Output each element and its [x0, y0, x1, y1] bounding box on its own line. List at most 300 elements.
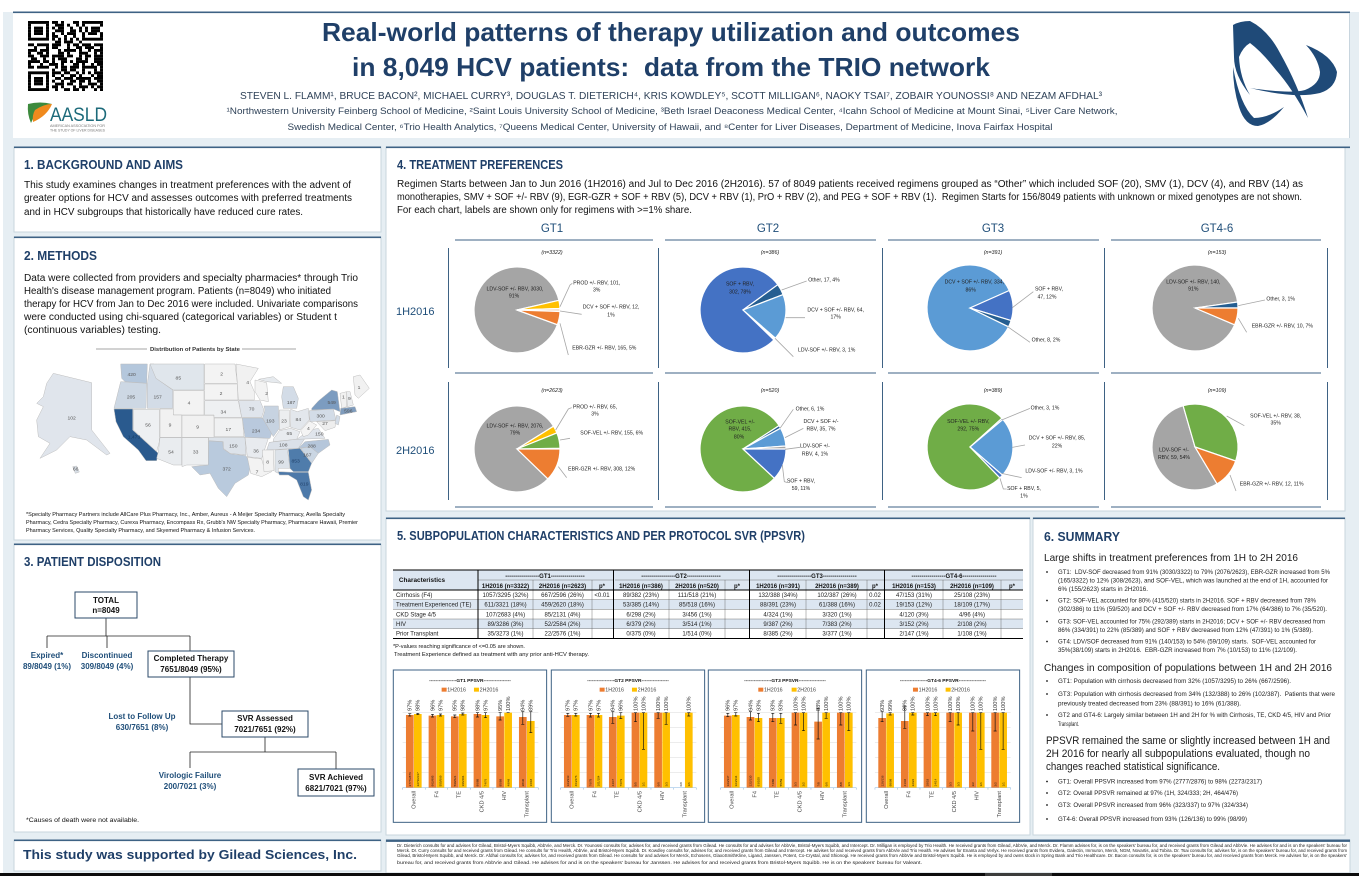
choropleth map: patients by state: 1: [342, 394, 345, 400]
bar chart: GT1 PPSVR: 962/995: [431, 775, 435, 786]
choropleth map: patients by state: 549: [327, 400, 336, 406]
pie chart: GT1 2H2016: (n=2623): [541, 388, 563, 394]
logo: AASLD: [28, 102, 107, 132]
choropleth map: patients by state: 596: [344, 409, 353, 415]
choropleth map: patients by state: 150: [229, 444, 238, 450]
bullets: treatment shifts: 86% (334/391) to 22% (85/389) and SOF + RBV decreased from 12% (47/391) to 1% (5/389).: [1058, 627, 1313, 634]
bar chart: GT1 PPSVR: TE: [457, 791, 463, 798]
table: subpopulation characteristics: 22/2576 (1%): [544, 632, 581, 638]
bullets: population changes: [1046, 678, 1336, 728]
choropleth map: patients by state: 17: [226, 427, 231, 433]
pie chart: GT1 1H2016: (n=3322): [541, 250, 563, 256]
bar chart: GT4-6 PPSVR: Transplant: [997, 791, 1003, 818]
bar chart: GT3 PPSVR: TE: [775, 791, 781, 798]
pie chart: GT4-6 1H2016: (n=153): [1208, 250, 1226, 256]
bar chart: GT1 PPSVR: 98%: [461, 700, 467, 711]
bar chart: GT2 PPSVR: CKD 4/5: [637, 791, 643, 812]
bar chart: GT4-6 PPSVR: Overall: [884, 791, 890, 809]
choropleth map: patients by state: 54: [168, 449, 174, 455]
choropleth map: patients by state: 288: [307, 444, 316, 450]
column heading: GT3: GT3: [982, 223, 1004, 235]
pie chart: GT2 2H2016: SOF-VEL +/-: [725, 419, 755, 425]
text: methods: [23, 273, 358, 336]
pie chart: GT3 2H2016: 22%: [1052, 443, 1063, 449]
logo: AASLD: AMERICAN ASSOCIATION FOR: [50, 124, 106, 128]
bar chart: GT3 PPSVR: 324/334: [734, 775, 738, 786]
bar chart: GT4-6 PPSVR: 100%: [948, 697, 954, 711]
bar chart: GT2 PPSVR: 464/476: [574, 775, 578, 786]
bar chart: GT1 PPSVR: 97%: [438, 700, 444, 711]
outcome: virologic failure: Virologic Failure: [159, 771, 222, 780]
bar chart: GT4-6 PPSVR: CKD 4/5: [952, 791, 958, 812]
choropleth map: patients by state: 4: [246, 380, 249, 386]
bar chart: GT4-6 PPSVR: 93%: [880, 700, 886, 711]
pie chart: GT2 2H2016: 59, 11%: [792, 486, 811, 492]
table: subpopulation characteristics: 52/2584 (2%): [544, 622, 581, 628]
footnote: specialty pharmacy partners: [26, 512, 358, 534]
table: subpopulation characteristics: 6/379 (2%): [626, 622, 656, 628]
text: background: greater options for HCV and assesses outcomes with preferred treatments: [24, 193, 352, 204]
bar chart: GT4-6 PPSVR: 3/3: [956, 782, 960, 786]
authors and affiliations: ¹Northwestern University Feinberg School of Medicine, ²Saint Louis University School of Medicine, ³Beth Israel Deaconess Medical Center, ⁴Icahn School of Medicine at Mount Sinai, ⁵Liver Care Network,: [226, 106, 1118, 116]
heading: methods: 2. METHODS: [24, 249, 97, 263]
pie chart: GT1 1H2016: 91%: [509, 294, 520, 300]
bar chart: GT3 PPSVR: Transplant: [843, 791, 849, 818]
bar chart: GT3 PPSVR: 1H2016: [764, 688, 783, 694]
bar chart: GT1 PPSVR: [393, 670, 547, 822]
subheading: population changes: Changes in composition of populations between 1H and 2H 2016: [1044, 662, 1332, 674]
bar chart: GT3 PPSVR: 100%: [793, 697, 799, 711]
bar chart: GT2 PPSVR: 3/3: [664, 782, 668, 786]
table: subpopulation characteristics: 61/388 (16%): [819, 603, 855, 609]
pie chart: GT2 2H2016: [700, 388, 839, 492]
bar chart: GT4-6 PPSVR: 100%: [979, 697, 985, 711]
table: subpopulation characteristics: 3/152 (2%): [899, 622, 929, 628]
pie chart: GT3 2H2016: Other, 3, 1%: [1031, 406, 1060, 412]
bar chart: GT3 PPSVR: HIV: [820, 791, 826, 800]
choropleth map: patients by state: 2: [220, 372, 223, 378]
table: subpopulation characteristics: 18/109 (17%): [954, 603, 990, 609]
pie chart: GT4-6 2H2016: (n=109): [1208, 388, 1226, 394]
bar chart: GT2 PPSVR: -----------------GT2 PPSVR-----------------: [587, 678, 669, 684]
bar chart: GT1 PPSVR: 74/76: [484, 779, 488, 786]
bar chart: GT4-6 PPSVR: 100%: [925, 697, 931, 711]
footnote: specialty pharmacy partners: Pharmacy, Cedra Specialty Pharmacy, Curexa Pharmacy, Encompass Rx, Grubb's NW Specialty Pharmacy, Pharmacare Hawaii, Premier: [26, 520, 358, 526]
table: subpopulation characteristics: 1H2016 (n=153): [892, 584, 936, 590]
bullets: population changes: GT3: Population with cirrhosis decreased from 34% (132/388) to 26% (102/387). Patients that were: [1058, 691, 1336, 698]
bullets: treatment shifts: GT1: LDV-SOF decreased from 91% (3030/3322) to 79% (2076/2623), EBR-GZR increased from 5%: [1058, 569, 1330, 576]
panel: subpopulation characteristics: [386, 518, 1030, 835]
table: subpopulation characteristics: 459/2620 (18%): [541, 603, 584, 609]
table: subpopulation characteristics: 1/514 (0%): [682, 632, 712, 638]
bar chart: GT1 PPSVR: 100%: [506, 697, 512, 711]
bar chart: GT2 PPSVR: 100%: [664, 697, 670, 711]
bar chart: GT1 PPSVR: F4: [434, 791, 440, 798]
box: SVR achieved: 6821/7021 (97%): [305, 784, 367, 793]
table: subpopulation characteristics: p*: [1009, 584, 1016, 590]
text: methods: Data were collected from providers and specialty pharmacies* through Trio: [24, 273, 358, 284]
text: treatment preferences intro: Regimen Starts between Jan to Jun 2016 (1H2016) and Jul to Dec 2016 (2H2016). 57 of 8049 patients received regimens grouped as “Other” which included SOF (20), SMV (1), DCV (4), and RBV (14) as: [397, 179, 1303, 190]
table: subpopulation characteristics: Prior Transplant: [396, 632, 439, 638]
logo: AASLD: THE STUDY OF LIVER DISEASES: [50, 128, 106, 132]
table: subpopulation characteristics: 89/382 (23%): [623, 593, 659, 599]
bar chart: GT4-6 PPSVR: 100%: [933, 697, 939, 711]
pie chart: GT1 1H2016: 1%: [607, 313, 615, 319]
bar chart: GT1 PPSVR: Transplant: [525, 791, 531, 818]
heading: subpopulation characteristics: 5. SUBPOPULATION CHARACTERISTICS AND PER PROTOCOL SVR (PPSVR): [397, 529, 805, 543]
table: subpopulation characteristics: -----------------GT1-----------------: [505, 574, 585, 580]
bar chart: GT1 PPSVR: 85/89: [498, 779, 502, 786]
bullets: treatment shifts: 6% (155/2623) starts in 2H2016.: [1058, 586, 1148, 593]
bar chart: GT1 PPSVR: 396/404: [461, 775, 465, 786]
subheading: PPSVR finding: [1046, 735, 1330, 773]
bullets: population changes: GT1: Population with cirrhosis decreased from 32% (1057/3295) to 26% (667/2596).: [1058, 678, 1291, 685]
outcome: expired: Expired*: [31, 651, 64, 660]
column heading: GT4-6: GT4-6: [1201, 223, 1233, 235]
title: Real-world patterns of therapy utilization and outcomes: [322, 17, 1020, 47]
pie chart: GT4-6 2H2016: 35%: [1271, 421, 1281, 427]
column heading: GT2: GT2: [757, 223, 779, 235]
bar chart: GT2 PPSVR: 96%: [619, 700, 625, 711]
table: subpopulation characteristics: 6/298 (2%): [626, 612, 656, 618]
outcome: discontinued: 309/8049 (4%): [81, 662, 134, 671]
choropleth map: patients by state: 27: [322, 421, 328, 427]
bar chart: GT2 PPSVR: 76/78: [589, 779, 593, 786]
pie chart: GT2 1H2016: SOF + RBV,: [726, 282, 754, 288]
bar chart: GT3 PPSVR: [708, 670, 862, 822]
choropleth map: patients by state: 66: [73, 467, 79, 473]
pie chart: GT4-6 2H2016: RBV, 59, 54%: [1158, 455, 1190, 461]
panel: patient disposition: [14, 544, 381, 832]
bullets: treatment shifts: GT3: SOF-VEL accounted for 75% (292/389) starts in 2H2016; DCV + SOF +/- RBV decreased from: [1058, 618, 1325, 626]
table: subpopulation characteristics: 1H2016 (n=386): [619, 584, 663, 590]
text: methods: (continuous variables) testing.: [24, 325, 161, 336]
pie chart: GT3 2H2016: LDV-SOF +/- RBV, 3, 1%: [1025, 468, 1083, 474]
bar chart: GT3 PPSVR: 55/59: [779, 779, 783, 786]
bar chart: GT4-6 PPSVR: 126/136: [880, 775, 884, 786]
bar chart: GT3 PPSVR: CKD 4/5: [797, 791, 803, 812]
row label: 2H2016: 2H2016: [396, 445, 435, 457]
pie chart: GT4-6 2H2016: EBR-GZR +/- RBV, 12, 11%: [1240, 482, 1304, 488]
bar chart: GT4-6 PPSVR: 100%: [911, 697, 917, 711]
bar chart: GT4-6 PPSVR: 89%: [903, 700, 909, 711]
pie chart: GT1 2H2016: 3%: [591, 412, 599, 418]
table: subpopulation characteristics: 1/108 (1%): [957, 632, 987, 638]
text: disclosures: Gilead, Bristol-Myers Squibb, and Merck. Dr. Afdhal consults for, advises for, and received grants from Gilead. He consults for and advises for Merck, Echosens, GlaxoSmithKline, Ligand, Janssen, Potent, Co-Crystal, and Shionogi. He received grants from AbbVie and Bristol-Myers Squibb. He is employed by and owns stock in Spring Bank and Trio Healthcare. Dr. Bacon consults for, is on the speakers' bureau for, and received grants from Merck. He advises for, is on the speakers': [397, 853, 1347, 858]
box: completed therapy: [148, 651, 234, 677]
pie chart: GT4-6 1H2016: 91%: [1188, 287, 1199, 293]
footnote: specialty pharmacy partners: Pharmacy Services, Quality Specialty Pharmacy, and Skyemed Pharmacy & Infusion Services.: [26, 528, 255, 534]
bar chart: GT1 PPSVR: CKD 4/5: [479, 791, 485, 812]
footnote: specialty pharmacy partners: *Specialty Pharmacy Partners include AllCare Plus Pharmacy, Inc., Amber, Aureus - A Meijer Specialty Pharmacy, Avella Specialty: [26, 512, 345, 518]
heading: summary: 6. SUMMARY: [1044, 530, 1121, 544]
choropleth map: patients by state: 150: [315, 432, 324, 438]
flowchart: disposition: [23, 592, 374, 796]
table: subpopulation characteristics: 89/3286 (3%): [487, 622, 524, 628]
bar chart: GT3 PPSVR: 6/6: [824, 782, 828, 786]
bar chart: GT1 PPSVR: 98%: [416, 700, 422, 711]
bar chart: GT4-6 PPSVR: 2/2: [971, 782, 975, 786]
table: subpopulation characteristics: -----------------GT4-6-----------------: [912, 574, 996, 580]
table: subpopulation characteristics: p*: [872, 584, 879, 590]
bar chart: GT1 PPSVR: 94%: [521, 700, 527, 711]
bar chart: GT1 PPSVR: 86/88: [476, 779, 480, 786]
pie chart: GT2 2H2016: Other, 6, 1%: [796, 407, 825, 413]
choropleth map: patients by state: 108: [279, 443, 288, 449]
text: treatment preferences intro: monotherapies, SMV + SOF +/- RBV (9), EGR-GZR + SOF + RBV (5), DCV + RBV (1), PrO + RBV (2), and PEG + SOF + RBV (1). Regimen Starts for 156/8049 patients with unknown or mixed genotypes are not shown.: [397, 192, 1302, 203]
bar chart: GT2 PPSVR: F4: [592, 791, 598, 798]
table: subpopulation characteristics: 0.02: [869, 593, 881, 599]
bar chart: GT3 PPSVR: 100%: [839, 697, 845, 711]
pie chart: GT3 1H2016: DCV + SOF +/- RBV, 334,: [945, 280, 1004, 286]
choropleth map: patients by state: 187: [287, 400, 295, 406]
bar chart: GT4-6 PPSVR: F4: [907, 791, 913, 798]
outcome: discontinued: [81, 651, 134, 671]
bar chart: GT4-6 PPSVR: 2/2: [993, 782, 997, 786]
table: subpopulation characteristics: CKD Stage 4/5: [396, 612, 437, 618]
pie chart: GT3 2H2016: [927, 388, 1085, 499]
bar chart: GT2 PPSVR: 97%: [574, 700, 580, 711]
bar chart: GT2 PPSVR: [551, 670, 705, 822]
bar chart: GT2 PPSVR: 101/104: [597, 775, 601, 786]
bar chart: GT1 PPSVR: 16/18: [529, 779, 533, 786]
bar chart: GT3 PPSVR: 97%: [734, 700, 740, 711]
choropleth map: patients by state: 234: [252, 429, 260, 435]
text: disclosures: [397, 843, 1347, 865]
table: subpopulation characteristics: Characteristics: [399, 577, 446, 584]
table: subpopulation characteristics: 1H2016 (n=391): [756, 584, 800, 590]
bar chart: GT4-6 PPSVR: HIV: [975, 791, 981, 800]
table: subpopulation characteristics: 1H2016 (n=3322): [482, 584, 529, 590]
bar chart: GT1 PPSVR: 555/569: [439, 775, 443, 786]
bar chart: GT3 PPSVR: 100%: [824, 697, 830, 711]
bar chart: GT1 PPSVR: 97%: [483, 700, 489, 711]
table: subpopulation characteristics: 4/96 (4%): [959, 612, 985, 618]
choropleth map: patients by state: 36: [253, 448, 259, 454]
bar chart: GT2 PPSVR: 97%: [566, 700, 572, 711]
bar chart: GT2 PPSVR: HIV: [660, 791, 666, 800]
title: [322, 17, 1020, 82]
box: total: [75, 592, 137, 618]
choropleth map: patients by state: 853: [291, 459, 300, 465]
bullets: PPSVR: GT3: Overall PPSVR increased from 96% (323/337) to 97% (324/334): [1058, 802, 1248, 809]
choropleth map: patients by state: 33: [193, 449, 199, 455]
bullets: treatment shifts: [1046, 569, 1330, 654]
panel: header: [13, 12, 1350, 138]
text: disclosures: bureau for, and received grants from AbbVie and Gilead. He advises for and is on the speakers' bureau for Janssen. He advises for and received grants from Bristol-Myers Squibb. He is on the speakers' bureau for Valeant.: [397, 860, 922, 865]
bar chart: GT4-6 PPSVR: -----------------GT4-6 PPSVR-----------------: [900, 678, 986, 684]
pie chart: GT1 1H2016: [474, 250, 639, 355]
box: completed therapy: 7651/8049 (95%): [160, 665, 222, 674]
bar chart: GT2 PPSVR: 100%: [633, 697, 639, 711]
table: subpopulation characteristics: 0.02: [869, 603, 881, 609]
table: subpopulation characteristics: p*: [599, 584, 606, 590]
bar chart: GT4-6 PPSVR: 100%: [956, 697, 962, 711]
bar chart: GT3 PPSVR: F4: [752, 791, 758, 798]
table: subpopulation characteristics: HIV: [396, 622, 406, 628]
authors and affiliations: [226, 91, 1118, 132]
pie chart: GT4-6 2H2016: SOF-VEL +/- RBV, 38,: [1250, 413, 1301, 419]
table: subpopulation characteristics: 132/388 (34%): [758, 593, 798, 599]
choropleth map: patients by state: 70: [249, 407, 255, 413]
pie chart: GT1 1H2016: PROD +/- RBV, 101,: [573, 281, 620, 287]
bar chart: GT4-6 PPSVR: TE: [929, 791, 935, 798]
table: subpopulation characteristics: 3/456 (1%): [682, 612, 712, 618]
bar chart: GT3 PPSVR: 323/337: [726, 775, 730, 786]
bar chart: GT3 PPSVR: 94%: [748, 700, 754, 711]
bar chart: GT3 PPSVR: 100%: [801, 697, 807, 711]
text: disclosures: Merck. Dr. Curry consults for and received grants from Gilead. He consults for Trio Health, AbbVie, and Bristol-Myers Squibb. Dr. Kowdley consults for, advises for, and received grants from Gilead and Intercept. He advises for and received grants from AbbVie and Trio Health. He advises for Enanta and Verlyx. He received grants from Evidera, Galectin, Immuron, Merck, NGM, Novartis, and Tobira. Dr. Tsai consults for, advises for, is on the speakers' bureau for, and received grants from: [397, 848, 1347, 853]
bar chart: GT3 PPSVR: 93%: [756, 700, 762, 711]
table: subpopulation characteristics: <0.01: [594, 593, 610, 599]
table: subpopulation characteristics: 2/108 (2%): [957, 622, 987, 628]
table footnotes: *P-values reaching significance of <=0.05 are shown.: [393, 644, 525, 650]
box: SVR assessed: SVR Assessed: [237, 714, 293, 723]
table: subpopulation characteristics: 111/518 (21%): [678, 593, 716, 599]
panel: methods: [14, 236, 381, 540]
text: background: and in HCV subgroups that historically have reduced cure rates.: [24, 207, 303, 218]
authors and affiliations: STEVEN L. FLAMM¹, BRUCE BACON², MICHAEL CURRY³, DOUGLAS T. DIETERICH⁴, KRIS KOWDLEY⁵, SCOTT MILLIGAN⁶, NAOKY TSAI⁷, ZOBAIR YOUNOSSI⁸ AND NEZAM AFDHAL³: [240, 91, 1103, 102]
pie chart: GT3 2H2016: SOF-VEL +/- RBV,: [947, 419, 990, 425]
choropleth map: patients by state: 4: [307, 426, 310, 432]
bullets: population changes: Transplant.: [1058, 721, 1079, 728]
row label: 1H2016: 1H2016: [396, 306, 435, 318]
table: subpopulation characteristics: 1057/3295 (32%): [482, 593, 529, 599]
panel: sponsor: [14, 840, 381, 871]
pie chart: GT1 1H2016: EBR-GZR +/- RBV, 165, 5%: [572, 345, 637, 351]
bar chart: GT3 PPSVR: 3/3: [794, 782, 798, 786]
table: subpopulation characteristics: 88/391 (23%): [760, 603, 796, 609]
bar chart: GT2 PPSVR: 6/6: [656, 782, 660, 786]
bar chart: GT4-6 PPSVR: 99%: [888, 700, 894, 711]
pie chart: GT1 1H2016: 3%: [593, 288, 601, 294]
choropleth map: patients by state: 84: [296, 417, 301, 423]
pie chart: GT2 1H2016: (n=386): [761, 250, 779, 256]
pie chart: GT4-6 1H2016: Other, 3, 1%: [1266, 297, 1295, 303]
bar chart: GT2 PPSVR: 1/1: [687, 782, 691, 786]
bullets: PPSVR: GT1: Overall PPSVR increased from 97% (2777/2876) to 98% (2273/2317): [1058, 778, 1262, 786]
box: SVR achieved: [298, 769, 374, 796]
pie chart: GT4-6 1H2016: EBR-GZR +/- RBV, 10, 7%: [1252, 324, 1313, 330]
bullets: treatment shifts: (302/386) to 11% (59/520) and DCV + SOF +/- RBV decreased from 17% (64/386) to 7% (35/520).: [1058, 606, 1327, 613]
pie chart: GT2 2H2016: DCV + SOF +/-: [804, 419, 839, 425]
bar chart: GT1 PPSVR: 1H2016: [447, 688, 466, 694]
bar chart: GT1 PPSVR: 97%: [408, 700, 414, 711]
bar chart: GT4-6 PPSVR: 98/99: [888, 779, 892, 786]
bar chart: GT2 PPSVR: TE: [615, 791, 621, 798]
title: in 8,049 HCV patients: data from the TRIO network: [352, 52, 991, 82]
bar chart: GT1 PPSVR: 49/49: [506, 779, 510, 786]
pie chart: GT4-6 2H2016: LDV-SOF +/-: [1159, 448, 1189, 454]
choropleth map: patients by state: 205: [127, 394, 135, 400]
pie chart: GT1 2H2016: [474, 388, 643, 492]
bar chart: GT1 PPSVR: 2273/2317: [416, 772, 420, 786]
footnote: causes of death: *Causes of death were not available.: [26, 817, 139, 824]
table: subpopulation characteristics: 7/383 (2%): [822, 622, 852, 628]
pie chart: GT1 2H2016: PROD +/- RBV, 65,: [573, 405, 617, 411]
bar chart: GT2 PPSVR: 97%: [596, 700, 602, 711]
choropleth map: patients by state: 420: [128, 372, 136, 378]
choropleth map: patients by state: 9: [196, 424, 199, 430]
choropleth map: patients by state: 23: [281, 419, 287, 425]
table: subpopulation characteristics: 35/3273 (1%): [487, 632, 524, 638]
table: subpopulation characteristics: -----------------GT2-----------------: [641, 574, 721, 580]
choropleth map: patients by state: 1: [358, 385, 361, 391]
box: completed therapy: Completed Therapy: [154, 654, 229, 663]
bar chart: GT4-6 PPSVR: 100%: [993, 697, 999, 711]
table: subpopulation characteristics: Treatment Experienced (TE): [396, 603, 471, 609]
arrows: disposition flow: [47, 618, 336, 769]
pie chart: GT3 1H2016: Other, 8, 2%: [1032, 338, 1061, 344]
box: SVR assessed: 7021/7651 (92%): [234, 725, 296, 734]
table: subpopulation characteristics: 4/120 (3%): [899, 612, 929, 618]
pie chart: GT3 1H2016: SOF + RBV,: [1035, 287, 1063, 293]
bar chart: GT1 PPSVR: 95%: [453, 700, 459, 711]
QR code: [28, 22, 103, 90]
pie chart: GT3 1H2016: 47, 12%: [1038, 294, 1057, 300]
bar chart: GT4-6 PPSVR: 14/14: [934, 779, 938, 786]
bar chart: GT4-6 PPSVR: 100%: [1001, 697, 1007, 711]
authors and affiliations: Swedish Medical Center, ⁶Trio Health Analytics, ⁷Queens Medical Center, University of Hawaii, and ⁸Center for Liver Diseases, Department of Medicine, Inova Fairfax Hospital: [288, 122, 1052, 132]
bar chart: GT2 PPSVR: 100%: [687, 697, 693, 711]
pie chart: GT2 1H2016: [700, 250, 864, 357]
bar chart: GT4-6 PPSVR: 3/3: [948, 782, 952, 786]
pie chart: GT3 2H2016: 292, 75%: [957, 427, 980, 433]
pie chart: GT1 1H2016: LDV-SOF +/- RBV, 3030,: [486, 287, 543, 293]
bar chart: GT3 PPSVR: -----------------GT3 PPSVR-----------------: [744, 678, 826, 684]
bar chart: GT1 PPSVR: HIV: [502, 791, 508, 800]
subheading: PPSVR finding: 2H 2016 for nearly all subpopulations evaluated, though no: [1046, 748, 1310, 760]
bar chart: GT4-6 PPSVR: 100%: [971, 697, 977, 711]
pie chart: GT1 1H2016: DCV + SOF +/- RBV, 12,: [583, 305, 639, 311]
pie chart: GT3 2H2016: (n=389): [984, 388, 1002, 394]
bar chart: GT4-6 PPSVR: [866, 670, 1020, 822]
text: background: This study examines changes in treatment preferences with the advent of: [24, 180, 351, 191]
subheading: PPSVR finding: changes reached statistical significance.: [1046, 761, 1220, 773]
table: subpopulation characteristics: 2H2016 (n=520): [675, 584, 719, 590]
map title: Distribution of Patients by State: [150, 347, 240, 353]
bar chart: GT4-6 PPSVR: 22/22: [911, 779, 915, 786]
table: subpopulation characteristics: 667/2596 (26%): [541, 593, 584, 599]
table: subpopulation characteristics: p*: [734, 584, 741, 590]
heading: background and aims: 1. BACKGROUND AND AIMS: [24, 158, 183, 172]
bar chart: GT3 PPSVR: 122/130: [749, 775, 753, 786]
bar chart: GT3 PPSVR: 93%: [771, 700, 777, 711]
bar chart: GT3 PPSVR: 93/100: [757, 777, 761, 786]
panel: background and aims: [14, 146, 381, 232]
outcome: lost to follow up: 630/7651 (8%): [116, 723, 169, 732]
bullets: treatment shifts: GT2: SOF-VEL accounted for 80% (415/520) starts in 2H2016. SOF + RBV decreased from 78%: [1058, 598, 1316, 604]
choropleth map: patients by state: 8: [266, 459, 269, 465]
logo: AASLD: AASLD: [50, 104, 107, 126]
choropleth map: patients by state: 2: [220, 391, 223, 397]
table: subpopulation characteristics: 25/108 (23%): [954, 593, 990, 599]
subheading: PPSVR finding: PPSVR remained the same or slightly increased between 1H and: [1046, 735, 1330, 747]
pie chart: GT2 2H2016: RBV, 4, 1%: [802, 452, 828, 458]
bar chart: GT2 PPSVR: Transplant: [683, 791, 689, 818]
table: subpopulation characteristics: 2H2016 (n=2623): [539, 584, 586, 590]
table: subpopulation characteristics: 2H2016 (n=389): [815, 584, 859, 590]
panel: treatment preferences: [386, 146, 1350, 511]
table footnotes: Treatment Experience defined as treatment with any prior anti-HCV therapy.: [394, 652, 589, 658]
pie chart: GT2 2H2016: (n=520): [761, 388, 779, 394]
bar chart: GT4-6 PPSVR: 2H2016: [951, 688, 970, 694]
pie chart: GT2 2H2016: SOF + RBV,: [787, 479, 815, 485]
table: subpopulation characteristics: 85/2131 (4%): [544, 612, 581, 618]
bar chart: GT2 PPSVR: Overall: [570, 791, 576, 809]
bar chart: GT1 PPSVR: 590/621: [453, 775, 457, 786]
bar chart: GT2 PPSVR: 97%: [588, 700, 594, 711]
